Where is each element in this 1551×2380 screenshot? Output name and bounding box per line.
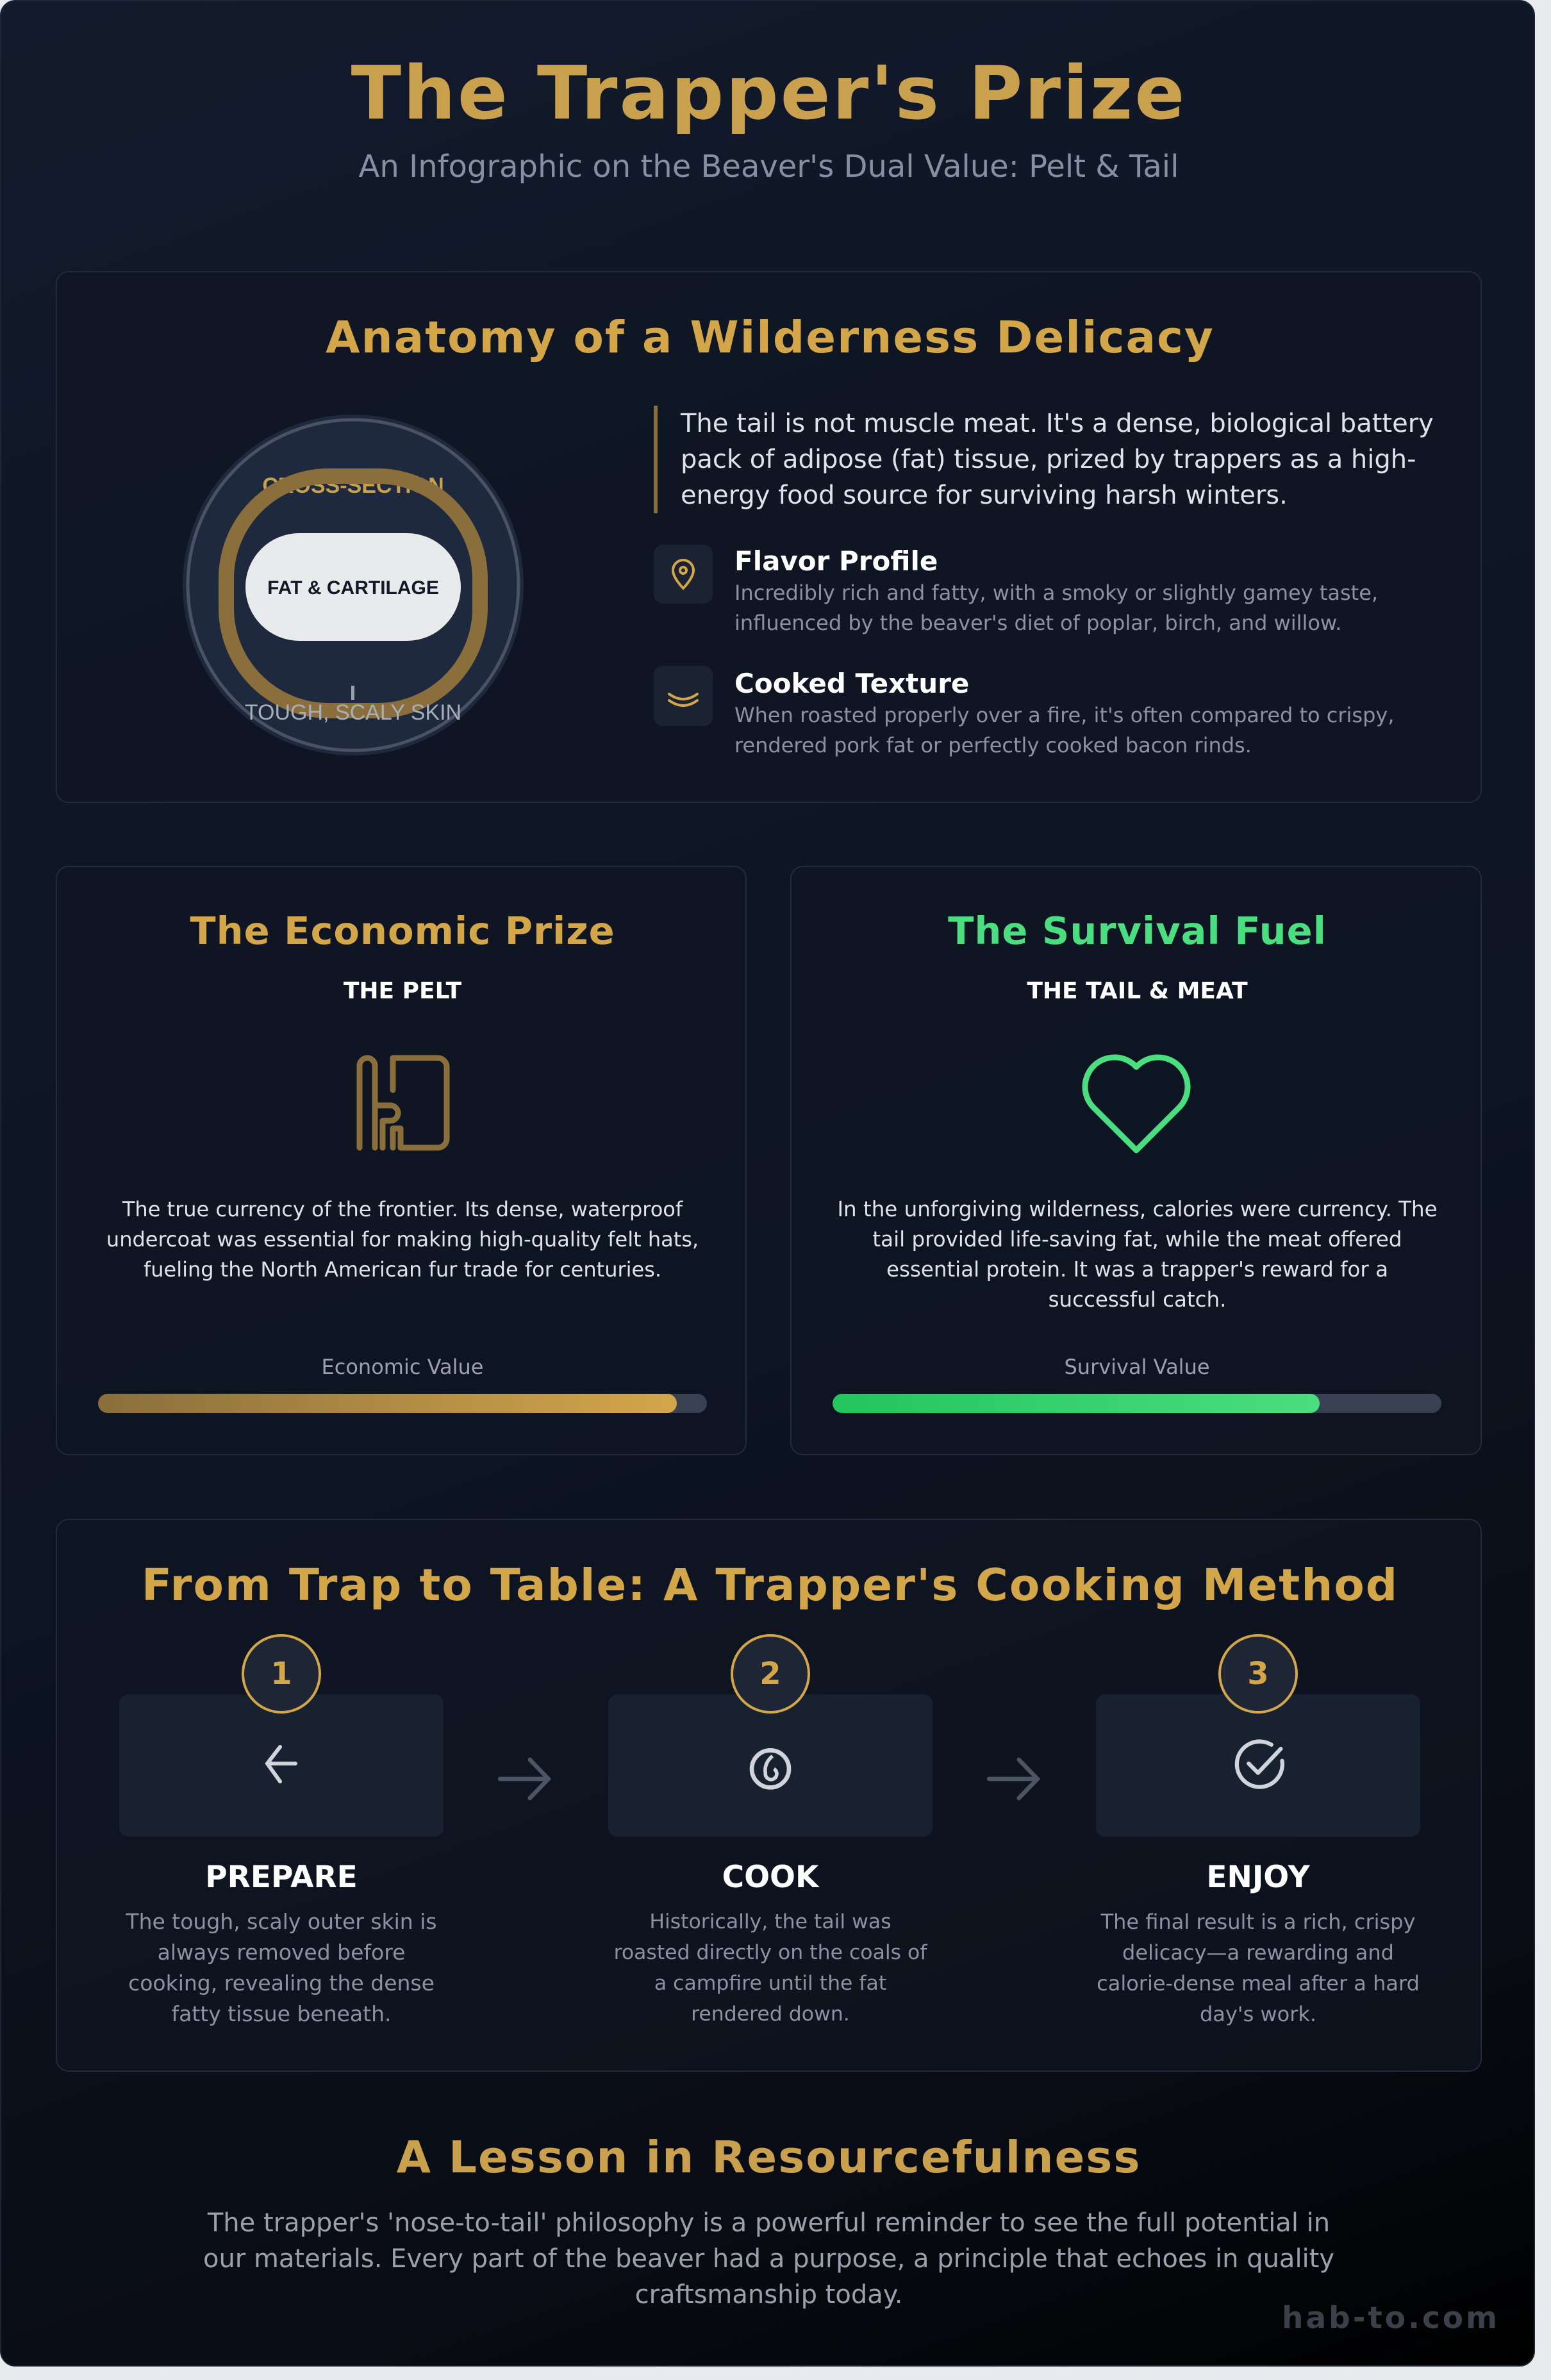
title: The Trapper's Prize bbox=[351, 51, 1186, 136]
text: flavor profile: Incredibly rich and fatty, with a smoky or slightly gamey taste, influenced by the beaver's diet of poplar, birch, and willow. bbox=[734, 581, 1378, 635]
watermark: hab-to.com bbox=[1282, 2301, 1500, 2336]
diagram: tail cross-section: FAT & CARTILAGE bbox=[267, 577, 439, 599]
text: cooked texture: Cooked Texture bbox=[734, 668, 969, 699]
text: cooked texture bbox=[734, 668, 1395, 757]
icon: pelt bbox=[356, 1055, 450, 1151]
text: cooked texture: When roasted properly over a fire, it's often compared to crispy, rendered pork fat or perfectly cooked bacon rinds. bbox=[734, 703, 1395, 757]
bar: survival value: Survival Value bbox=[1064, 1355, 1210, 1379]
arrow 1 bbox=[497, 1757, 551, 1801]
text: conclusion: The trapper's 'nose-to-tail' philosophy is a powerful reminder to see the full potential in our materials. Every part of the beaver had a purpose, a principle that echoes in quality craftsmanship today. bbox=[203, 2208, 1334, 2310]
panel: survival fuel bbox=[790, 866, 1482, 1455]
diagram: tail cross-section: CROSS-SECTION bbox=[262, 474, 444, 498]
step 1: prepare: 1 bbox=[270, 1656, 292, 1692]
arrow 2 bbox=[987, 1757, 1041, 1801]
step 2: cook: Historically, the tail was roasted directly on the coals of a campfire until the fat rendered down. bbox=[614, 1910, 927, 2026]
text: flavor profile: Flavor Profile bbox=[734, 545, 938, 577]
subtitle: An Infographic on the Beaver's Dual Value: Pelt & Tail bbox=[359, 149, 1179, 185]
step 1: prepare: PREPARE bbox=[205, 1860, 358, 1895]
text: pelt description: The true currency of the frontier. Its dense, waterproof undercoat was essential for making high-quality felt hats, fueling the North American fur trade for centuries. bbox=[106, 1197, 699, 1282]
heading: conclusion: A Lesson in Resourcefulness bbox=[397, 2132, 1141, 2183]
panel: anatomy bbox=[56, 271, 1482, 803]
heading: anatomy: Anatomy of a Wilderness Delicacy bbox=[326, 312, 1215, 363]
heading: cooking: From Trap to Table: A Trapper's Cooking Method bbox=[142, 1560, 1398, 1611]
bar: economic value bbox=[98, 1355, 707, 1413]
icon: heart bbox=[1082, 1055, 1191, 1153]
subheading: tail & meat: THE TAIL & MEAT bbox=[1027, 978, 1248, 1004]
diagram: tail cross-section: TOUGH, SCALY SKIN bbox=[245, 700, 461, 725]
bar: survival value bbox=[833, 1355, 1441, 1413]
step 3: enjoy: The final result is a rich, crispy delicacy—a rewarding and calorie-dense meal after a hard day's work. bbox=[1097, 1910, 1420, 2026]
step 1: prepare: The tough, scaly outer skin is always removed before cooking, revealing the dense fatty tissue beneath. bbox=[126, 1909, 437, 2026]
step 3: enjoy bbox=[1096, 1634, 1420, 2026]
text block: tail description: The tail is not muscle meat. It's a dense, biological battery pack of adipose (fat) tissue, prized by trappers as a high-energy food source for surviving harsh winters. bbox=[681, 409, 1434, 510]
step 3: enjoy: ENJOY bbox=[1206, 1860, 1310, 1895]
step 1: prepare bbox=[119, 1634, 444, 2026]
step 3: enjoy: 3 bbox=[1247, 1656, 1269, 1692]
heading: economic: The Economic Prize bbox=[190, 909, 615, 953]
step 2: cook: 2 bbox=[759, 1656, 781, 1692]
panel: cooking method bbox=[56, 1519, 1482, 2072]
icon: smile curve bbox=[654, 666, 713, 726]
bar: economic value: Economic Value bbox=[322, 1355, 483, 1379]
step 2: cook: COOK bbox=[722, 1860, 818, 1895]
panel: economic prize bbox=[56, 866, 747, 1455]
heading: survival: The Survival Fuel bbox=[948, 909, 1327, 953]
icon: location pin bbox=[654, 545, 713, 604]
diagram: tail cross-section bbox=[183, 415, 524, 756]
subheading: pelt: THE PELT bbox=[344, 978, 461, 1004]
text: flavor profile bbox=[734, 545, 1378, 635]
text: tail description: In the unforgiving wilderness, calories were currency. The tail provided life-saving fat, while the meat offered essential protein. It was a trapper's reward for a successful catch. bbox=[837, 1197, 1438, 1312]
step 2: cook bbox=[608, 1634, 933, 2026]
